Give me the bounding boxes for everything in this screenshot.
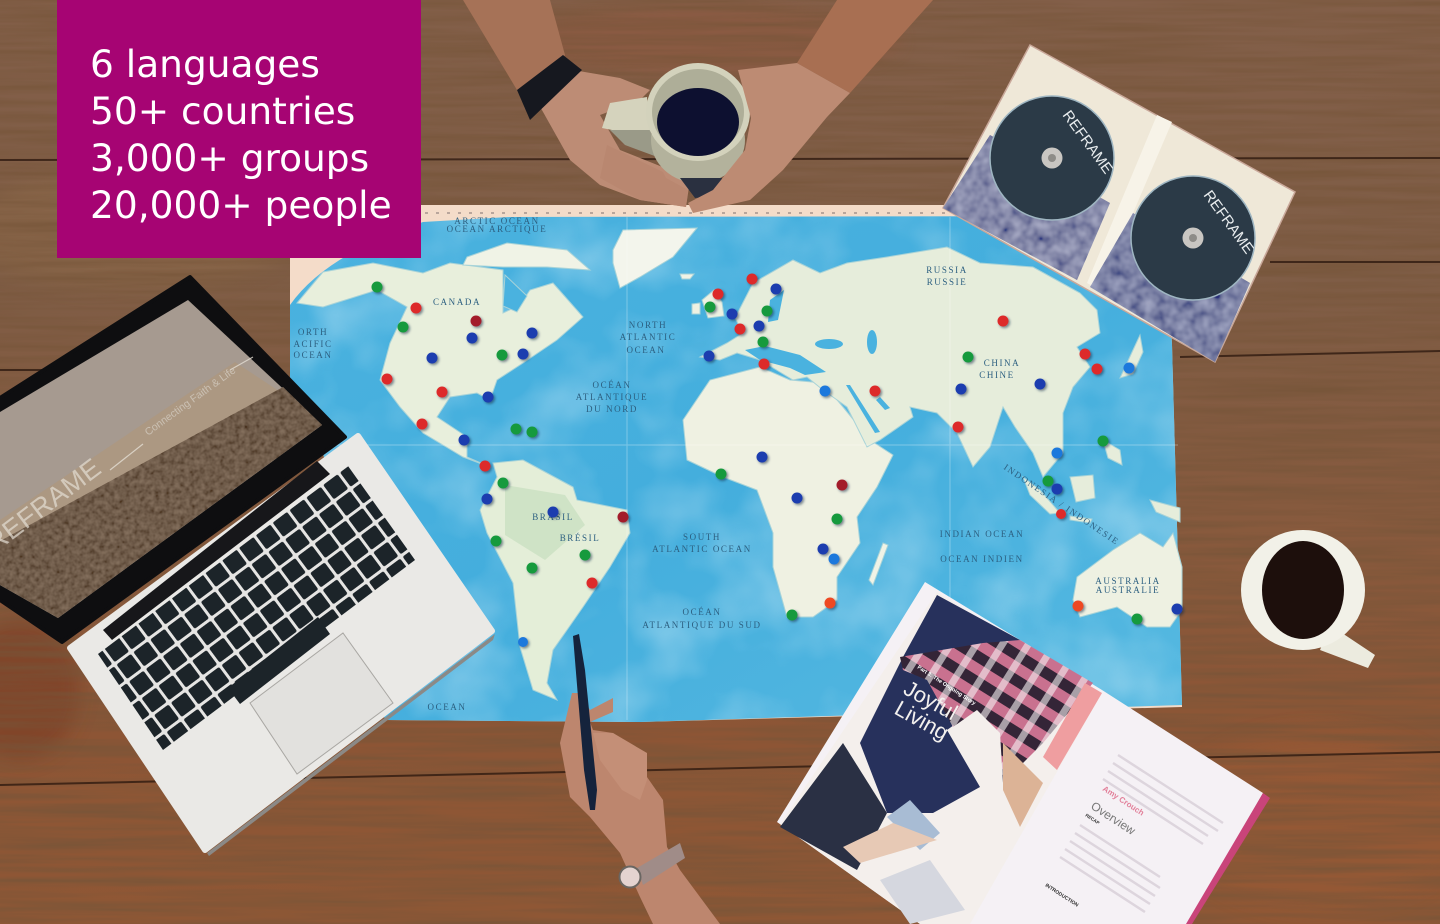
- cuff: [887, 800, 940, 850]
- open booklet: Amy Crouch: [1101, 784, 1146, 818]
- map labels: [293, 216, 1161, 712]
- map labels: RUSSIA: [926, 265, 968, 275]
- map paper: [290, 205, 1182, 722]
- open booklet: [777, 582, 1270, 924]
- map labels: OCEAN ARCTIQUE: [447, 224, 547, 234]
- thumb: [593, 733, 647, 800]
- map labels: ATLANTIC OCEAN: [652, 544, 752, 554]
- inland seas: [745, 290, 890, 433]
- map labels: ARCTIC OCEAN: [454, 216, 540, 226]
- map labels: ATLANTIC: [620, 332, 676, 342]
- coffee cup on right: [1241, 530, 1375, 668]
- disc one: REFRAME: [1059, 107, 1116, 177]
- open booklet: Overview: [1088, 799, 1138, 838]
- hinge: [103, 461, 330, 640]
- map fold lines: [290, 217, 1178, 720]
- continents: [297, 228, 1182, 700]
- laptop: [0, 277, 495, 856]
- plaid shirt: [900, 640, 1093, 783]
- map labels: BRASIL: [532, 512, 574, 522]
- map ocean: [290, 216, 1182, 722]
- top border scale: [425, 212, 945, 214]
- disc two: REFRAME: [1200, 187, 1257, 257]
- stats box: 3,000+ groups: [90, 136, 369, 180]
- map labels: ORTH: [298, 327, 328, 337]
- blurred street: [880, 860, 965, 924]
- screen photo: [0, 300, 322, 618]
- laptop base: [70, 436, 492, 850]
- screen photo: Connecting Faith & Life: [143, 364, 238, 438]
- map labels: INDONESIA / INDONESIE: [1002, 462, 1121, 547]
- map labels: RUSSIE: [927, 277, 967, 287]
- trackpad: [250, 633, 393, 774]
- left hand: [538, 70, 690, 207]
- top hands holding coffee mug: [463, 0, 933, 213]
- map labels: OCEAN INDIEN: [940, 554, 1024, 564]
- bicycle: [780, 743, 887, 870]
- page text lines: [1060, 755, 1223, 912]
- left fingers: [600, 145, 688, 207]
- stats box: 6 languages: [90, 42, 320, 86]
- mug: [602, 63, 750, 198]
- map labels: AUSTRALIE: [1096, 585, 1160, 595]
- pen: [573, 634, 597, 810]
- map labels: DU NORD: [586, 404, 638, 414]
- jeans: [860, 595, 1020, 813]
- map labels: CHINA: [984, 358, 1020, 368]
- DVD case with two discs: [943, 45, 1295, 362]
- map pins: [372, 274, 1182, 647]
- map labels: ATLANTIQUE DU SUD: [642, 620, 762, 630]
- stats box: [57, 0, 421, 258]
- map labels: OCEAN: [626, 345, 666, 355]
- cover photo: [780, 592, 1102, 924]
- bottom hand holding pen: [560, 634, 720, 924]
- open booklet: INTRODUCTION: [1044, 883, 1080, 909]
- map labels: ACIFIC: [293, 339, 333, 349]
- fitness band: [517, 55, 582, 120]
- map labels: CANADA: [433, 297, 481, 307]
- disc two: [1131, 176, 1257, 300]
- page edge: [1186, 793, 1270, 924]
- spine: [1087, 115, 1172, 290]
- map labels: OCÉAN: [592, 380, 632, 390]
- world map: [290, 205, 1182, 722]
- stats box: 50+ countries: [90, 89, 355, 133]
- laptop screen: [0, 277, 345, 642]
- map labels: INDIAN OCEAN: [940, 529, 1024, 539]
- wristwatch: [620, 843, 685, 888]
- map labels: OCÉAN: [682, 607, 722, 617]
- map labels: AUSTRALIA: [1095, 576, 1161, 586]
- map labels: ATLANTIQUE: [576, 392, 648, 402]
- forearm: [1003, 743, 1043, 827]
- disc one: [990, 96, 1116, 220]
- open booklet: Joyful: [900, 676, 962, 725]
- map labels: OCEAN: [294, 350, 332, 360]
- open booklet: Living: [891, 696, 953, 745]
- stats box: 20,000+ people: [90, 183, 392, 227]
- keyboard: [98, 466, 415, 750]
- space bar: [228, 617, 330, 704]
- open booklet: RECAP: [1084, 813, 1100, 825]
- calf: [843, 823, 937, 863]
- map labels: SOUTH: [683, 532, 721, 542]
- city artwork: [943, 135, 1250, 362]
- map labels: BRÉSIL: [560, 533, 600, 543]
- map labels: NORTH: [629, 320, 667, 330]
- right hand: [688, 63, 850, 213]
- map labels: CHINE: [979, 370, 1015, 380]
- right arm: [797, 0, 933, 93]
- left arm: [463, 0, 565, 103]
- open booklet: Part 3: The Ongoing Story: [916, 665, 977, 707]
- pink tab: [1043, 683, 1102, 770]
- map labels: OCEAN: [428, 702, 466, 712]
